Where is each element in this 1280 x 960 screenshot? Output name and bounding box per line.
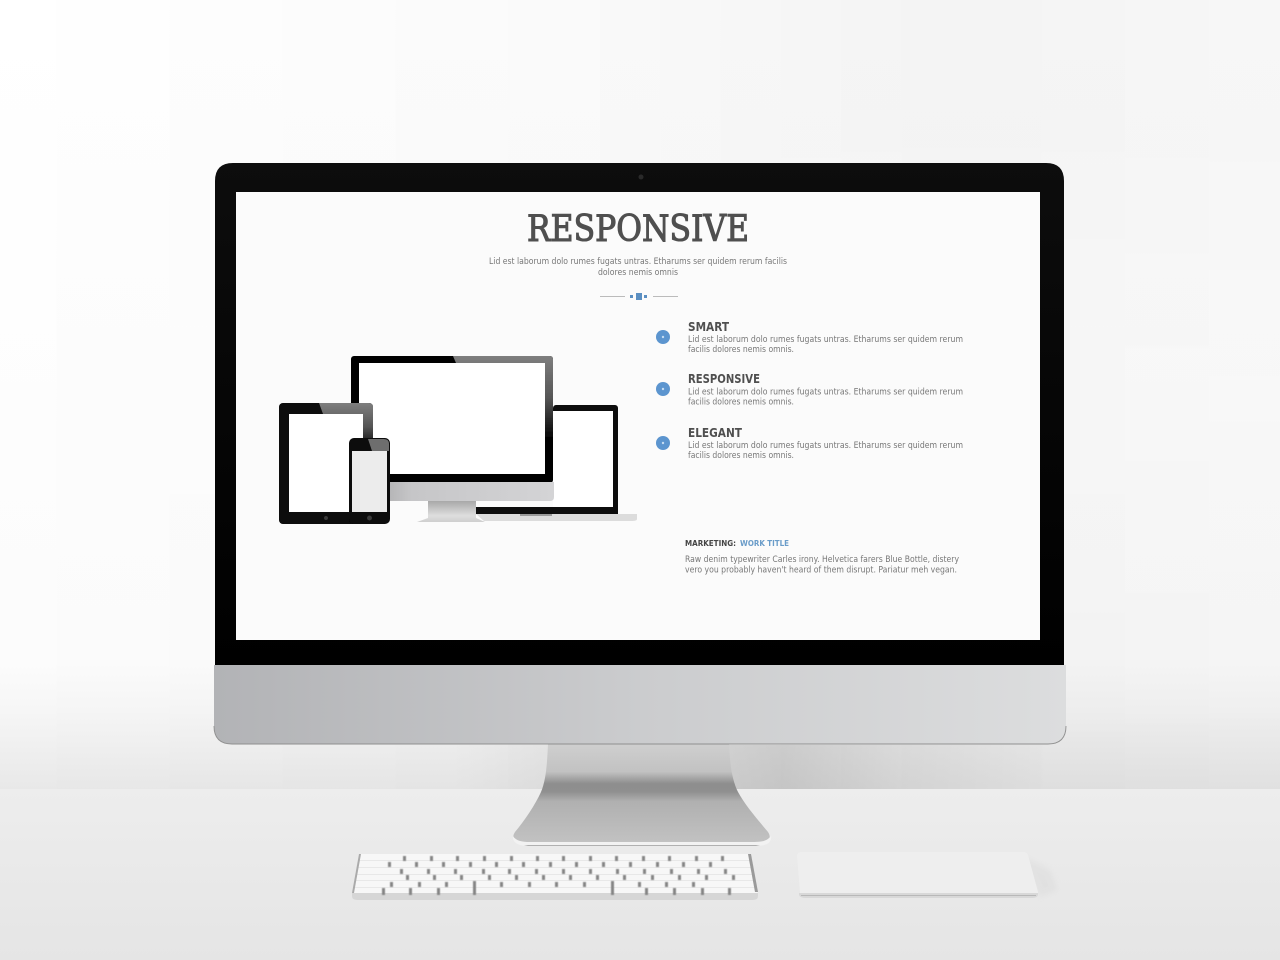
monitor bezel (214, 163, 1066, 672)
feature: elegant (656, 426, 963, 461)
subtitle text: Lid est laborum dolo rumes fugats untras. Etharums ser quidem rerum facilis (489, 257, 787, 267)
marketing note: vero you probably haven't heard of them disrupt. Pariatur meh vegan. (685, 566, 957, 576)
feature: smart: Lid est laborum dolo rumes fugats untras. Etharums ser quidem rerum (688, 335, 963, 345)
subtitle text: dolores nemis omnis (598, 268, 678, 278)
marketing note: WORK TITLE (740, 539, 789, 548)
feature: responsive (656, 372, 963, 408)
feature: elegant: facilis dolores nemis omnis. (688, 451, 794, 461)
marketing note: MARKETING: (685, 539, 736, 548)
feature: elegant: Lid est laborum dolo rumes fugats untras. Etharums ser quidem rerum (688, 441, 963, 451)
feature: smart: SMART (688, 320, 730, 334)
feature list (656, 320, 963, 461)
feature: elegant: ELEGANT (688, 426, 743, 440)
monitor chin (214, 665, 1066, 744)
tablet (279, 403, 373, 524)
trackpad (797, 852, 1058, 898)
feature: responsive: RESPONSIVE (688, 372, 760, 386)
title: RESPONSIVE (527, 209, 749, 250)
laptop (476, 405, 637, 521)
keyboard (352, 854, 758, 900)
subtitle text (489, 257, 787, 278)
marketing note: Raw denim typewriter Carles irony. Helvetica farers Blue Bottle, distery (685, 555, 959, 565)
divider ornament (600, 293, 678, 300)
feature: responsive: Lid est laborum dolo rumes fugats untras. Etharums ser quidem rerum (688, 388, 963, 398)
feature: smart (656, 320, 963, 355)
monitor stand (513, 744, 771, 846)
screen slide (236, 192, 1040, 640)
webcam (638, 174, 644, 180)
desktop monitor (351, 356, 554, 522)
feature: smart: facilis dolores nemis omnis. (688, 345, 794, 355)
monitor (214, 163, 1066, 744)
marketing note (685, 539, 959, 576)
phone (349, 438, 390, 524)
feature: responsive: facilis dolores nemis omnis. (688, 398, 794, 408)
device illustration (279, 356, 637, 524)
